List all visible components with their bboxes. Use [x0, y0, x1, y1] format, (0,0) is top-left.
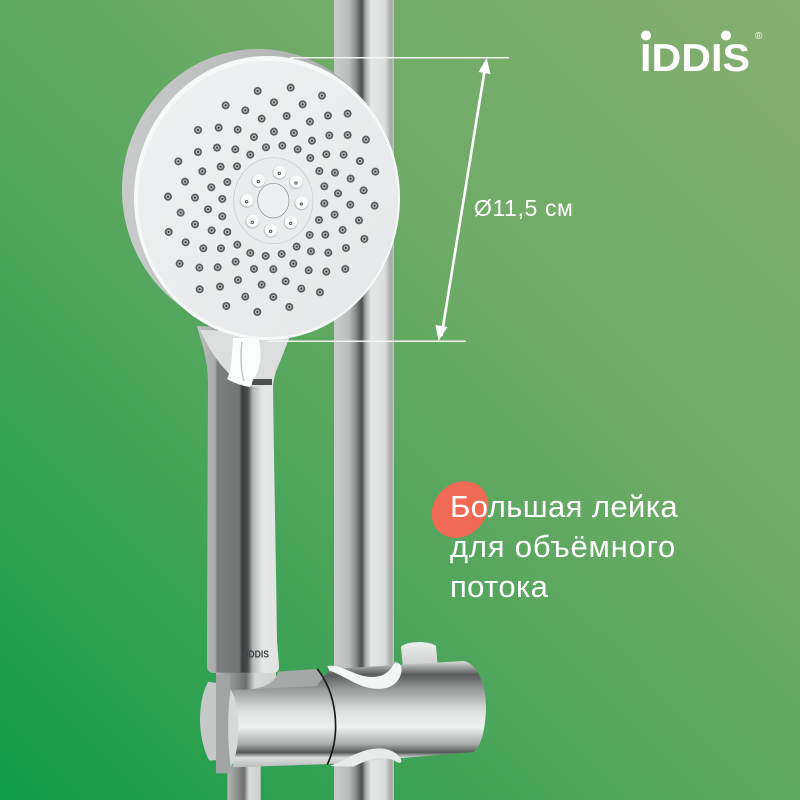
holder top button: [401, 642, 438, 672]
hand shower: [122, 49, 400, 673]
neck white clip: [227, 338, 261, 387]
double-headed dimension arrow: [436, 58, 490, 341]
centre jet ring: [234, 158, 313, 244]
holder body: [230, 661, 486, 767]
IDDIS logo: IDDIS: [640, 37, 750, 80]
shower head face: [138, 61, 398, 337]
spray nozzles: [164, 84, 379, 316]
bottom dimension line: [268, 340, 466, 342]
neck pocket: [252, 379, 272, 385]
headline: потока: [450, 569, 549, 604]
top dimension line: [290, 57, 509, 58]
brand mark on handle: IDDIS: [246, 648, 269, 660]
upper white clip: [327, 662, 402, 689]
headline: Большая лейка: [450, 489, 678, 524]
neck clip gap: [241, 342, 244, 381]
handle: [197, 326, 293, 673]
bracket arm: [216, 675, 230, 773]
diameter label: Ø11,5 см: [474, 195, 573, 221]
lower white clip: [330, 748, 401, 767]
holder rear band: [235, 669, 330, 691]
shower head white rim: [134, 56, 400, 340]
neck cup: [200, 330, 292, 387]
handle collar: [216, 673, 276, 693]
vertical shower rail: [334, 0, 394, 800]
lower hose pipe: [227, 765, 261, 800]
holder end cap: [228, 689, 238, 767]
headline: для объёмного: [450, 529, 676, 564]
holder seam: [317, 669, 336, 765]
rear bracket: [200, 682, 218, 761]
IDDIS logo: ®: [755, 31, 763, 42]
red accent blob: [420, 470, 500, 549]
shower head back shell: [122, 49, 394, 331]
sliding holder assembly: [200, 642, 486, 800]
